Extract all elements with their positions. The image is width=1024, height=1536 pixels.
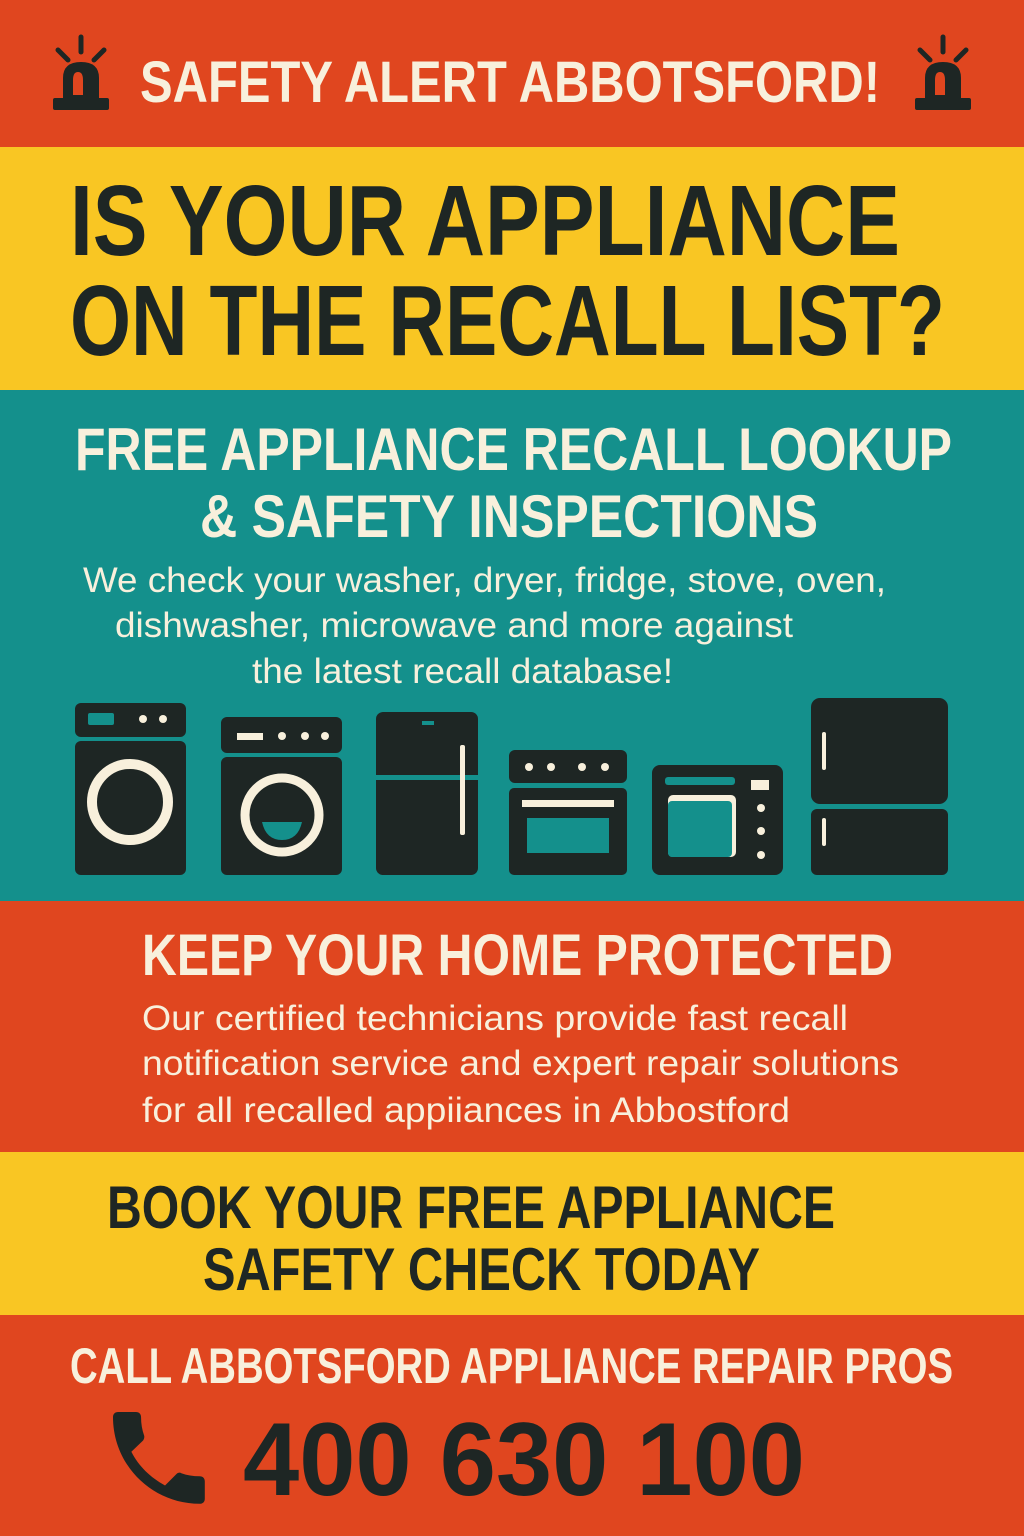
icon: fridge xyxy=(376,712,478,875)
band: call xyxy=(0,1315,1024,1536)
text: appliance check description: We check your washer, dryer, fridge, stove, oven, xyxy=(83,561,886,600)
heading: book safety check xyxy=(107,1174,835,1303)
heading: keep your home protected: KEEP YOUR HOME PROTECTED xyxy=(142,923,893,988)
icon: microwave xyxy=(652,765,783,875)
band: alert header xyxy=(0,0,1024,147)
icon: right siren xyxy=(915,37,971,110)
icon: big fridge xyxy=(811,698,948,875)
text: technicians description: Our certified technicians provide fast recall xyxy=(142,999,848,1038)
icon: oven xyxy=(509,750,627,875)
heading: free recall lookup: & SAFETY INSPECTIONS xyxy=(200,483,818,550)
icon: left siren xyxy=(53,37,109,110)
band: teal lookup xyxy=(0,390,1024,901)
text: phone number: 400 630 100 xyxy=(243,1402,805,1518)
heading: book safety check: BOOK YOUR FREE APPLIANCE xyxy=(107,1174,835,1241)
text: technicians description: notification service and expert repair solutions xyxy=(142,1044,899,1083)
band: protected xyxy=(0,901,1024,1152)
text: technicians description xyxy=(142,999,899,1130)
icon: phone xyxy=(113,1412,205,1504)
heading: free recall lookup xyxy=(75,416,952,550)
headline xyxy=(70,165,945,377)
text: appliance check description: dishwasher, microwave and more against xyxy=(115,606,793,645)
text: appliance check description: the latest recall database! xyxy=(252,652,673,691)
band: booking xyxy=(0,1152,1024,1315)
icon: dryer xyxy=(221,717,342,875)
icon: washer xyxy=(75,703,186,875)
band: headline xyxy=(0,147,1024,390)
heading: book safety check: SAFETY CHECK TODAY xyxy=(203,1236,760,1303)
text: technicians description: for all recalled appiiances in Abbostford xyxy=(142,1091,790,1130)
title: safety alert: SAFETY ALERT ABBOTSFORD! xyxy=(140,50,880,115)
text: appliance check description xyxy=(83,561,886,691)
